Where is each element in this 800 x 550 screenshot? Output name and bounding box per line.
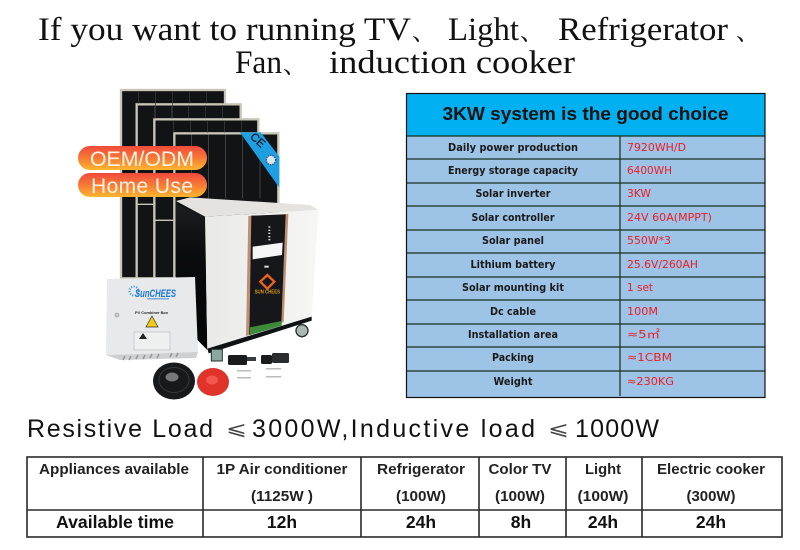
table header labels: (100W) [495, 489, 545, 505]
spec values: ≈1CBM [627, 351, 672, 364]
table header labels [39, 462, 765, 505]
badge: Home Use: Home Use [91, 175, 193, 198]
appliances table [27, 457, 782, 537]
available time row: 8h [511, 512, 531, 532]
available time row [56, 512, 726, 532]
table header: 3KW system is the good choice [442, 103, 728, 124]
table header labels: (300W) [686, 489, 736, 505]
load heading: ⩽ [226, 418, 247, 440]
pv combiner box: PV Combiner Box [135, 310, 169, 315]
table header labels: 1P Air conditioner [216, 462, 348, 478]
title: Fan [235, 45, 282, 81]
table header labels: Appliances available [39, 462, 189, 478]
available time row: 12h [267, 512, 297, 532]
table header labels: (1125W ) [251, 489, 313, 505]
title: 、 [283, 53, 307, 79]
ce corner badge [240, 131, 279, 188]
load heading: 1000W [575, 415, 659, 443]
spec labels: Installation area [468, 328, 558, 341]
spec labels: Solar inverter [476, 187, 551, 200]
available time row: 24h [588, 512, 618, 532]
table header labels: Electric cooker [657, 462, 765, 478]
product photo: solar kit [106, 90, 318, 400]
spec values: 100M [627, 305, 658, 318]
load heading: Resistive Load [27, 415, 213, 443]
available time row: 24h [696, 512, 726, 532]
spec values: 550W*3 [627, 234, 671, 247]
load heading: ⩽ [548, 418, 569, 440]
available time row: Available time [56, 512, 174, 532]
spec labels: Daily power production [448, 141, 578, 154]
spec values: 25.6V/260AH [627, 258, 698, 271]
black cable coil [153, 362, 195, 400]
pv combiner box [106, 277, 198, 360]
red cable coil [197, 368, 229, 396]
title: Refrigerator [558, 12, 728, 48]
spec labels: Weight [494, 375, 532, 388]
table header [406, 93, 765, 136]
spec values: 7920WH/D [627, 141, 686, 154]
spec labels: Energy storage capacity [448, 164, 578, 177]
title: If you want to running TV [38, 12, 411, 48]
spec labels: Solar panel [482, 234, 544, 247]
title: induction cooker [329, 45, 575, 81]
spec values: ≈5㎡ [627, 328, 660, 341]
title: 、 [736, 20, 760, 46]
badge: OEM/ODM: OEM/ODM [90, 148, 194, 171]
spec labels: Dc cable [490, 305, 536, 318]
spec labels: Lithium battery [470, 258, 556, 271]
spec labels: Solar controller [472, 211, 555, 224]
available time row: 24h [406, 512, 436, 532]
table header labels: Refrigerator [377, 462, 465, 478]
spec values: ≈230KG [627, 375, 674, 388]
spec values: 6400WH [627, 164, 672, 177]
panel: system specification table [406, 93, 765, 398]
table header labels: Light [585, 462, 621, 478]
table header labels: Color TV [488, 462, 552, 478]
energy storage cabinet: SUN CHEES [255, 290, 280, 296]
table header labels: (100W) [578, 489, 629, 505]
energy storage cabinet [176, 197, 318, 361]
table header labels: (100W) [396, 489, 446, 505]
pv combiner box: SunCHEES [135, 288, 176, 300]
spec values: 1 set [627, 281, 654, 294]
mc4 connectors [228, 353, 289, 378]
spec values: 3KW [627, 187, 651, 200]
load heading [27, 415, 659, 443]
title: 、 [412, 20, 436, 46]
title: 、 [520, 20, 544, 46]
load heading: 3000W,Inductive load [252, 415, 535, 443]
title: Light [448, 12, 519, 48]
spec labels: Solar mounting kit [462, 281, 564, 294]
spec labels [448, 141, 578, 388]
title [38, 12, 760, 81]
spec values [627, 141, 712, 388]
spec labels: Packing [492, 351, 534, 364]
spec values: 24V 60A(MPPT) [627, 211, 712, 224]
ce corner badge: CE [247, 131, 268, 151]
solar panels [121, 90, 279, 278]
